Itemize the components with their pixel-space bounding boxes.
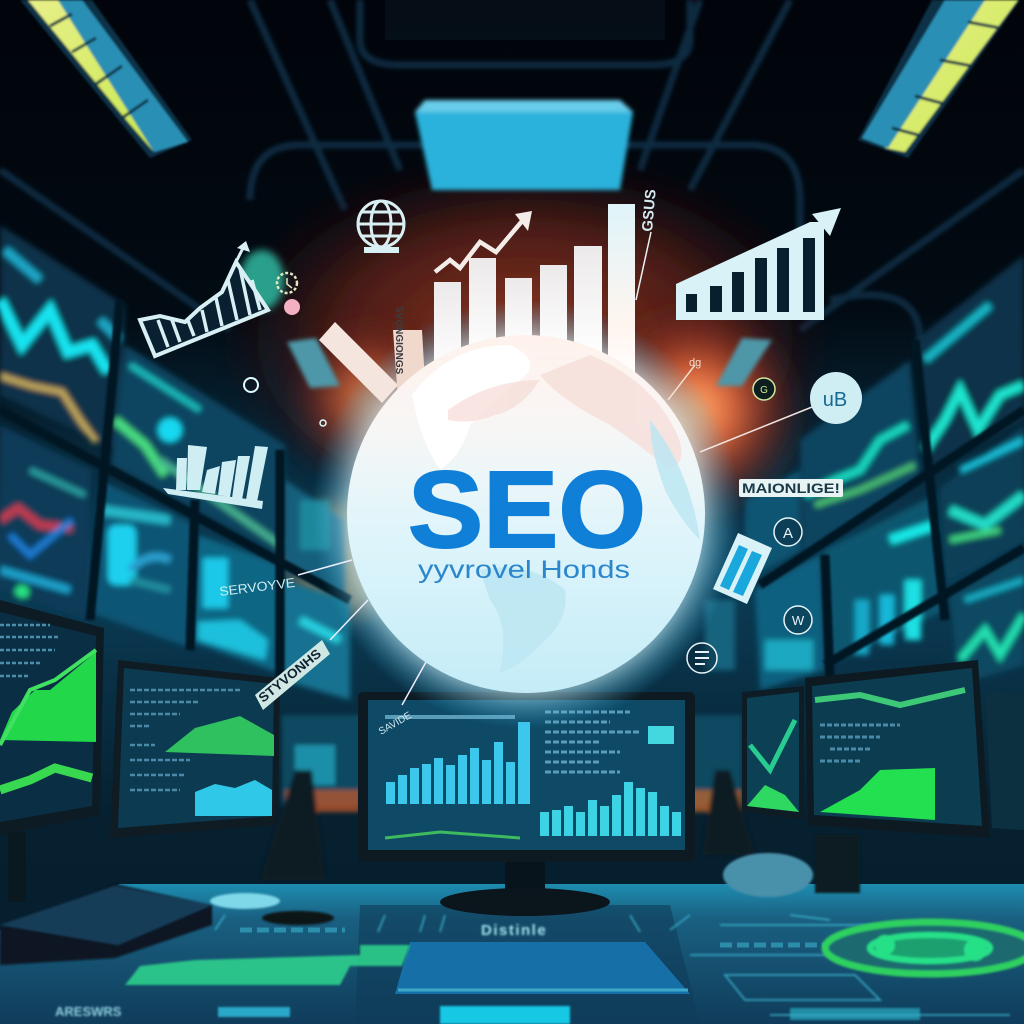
label: servoyve: SERVOYVE	[219, 575, 296, 599]
small dot	[320, 420, 326, 426]
icon: globe small	[358, 201, 404, 250]
icon: list circle	[687, 643, 717, 673]
icon: small ring	[244, 378, 258, 392]
left wall monitors	[0, 225, 350, 700]
globe continents	[412, 345, 530, 470]
label: top right vertical	[636, 189, 660, 300]
bar chart icon: small left	[163, 445, 268, 509]
desk label: Distinle	[481, 922, 547, 939]
icon: link circle: W	[792, 613, 805, 628]
desk props	[210, 835, 860, 925]
label: savide	[377, 662, 426, 738]
label: marketing tag: MAIONLIGE!	[742, 480, 840, 496]
label: rising tag	[668, 357, 701, 400]
label: top right vertical: GSUS	[639, 189, 660, 232]
icon: blue card	[713, 533, 772, 604]
background monitors: center-right	[690, 715, 755, 855]
ceiling light: left	[20, 0, 192, 158]
desktop monitor: right	[805, 660, 990, 838]
keyboard	[0, 884, 212, 965]
heading: SEO: SEO	[408, 449, 646, 571]
right wall monitors	[705, 255, 1024, 690]
red glow behind charts	[215, 150, 835, 615]
label: styvonhs tag: STYVONHS	[255, 646, 324, 705]
icon: small A circle	[774, 518, 802, 546]
icon: small green badge: G	[760, 385, 768, 396]
icon: line chart left	[140, 241, 284, 356]
desktop monitor: left	[110, 660, 280, 838]
icon: small A circle: A	[783, 525, 793, 542]
icon: gear	[277, 273, 297, 293]
desk surface	[0, 884, 1024, 1024]
small skylights	[287, 338, 772, 388]
subheading: yyvrovel Honds	[418, 556, 630, 584]
bar label: SVONGIONGS	[393, 306, 404, 375]
bar chart icon: right with arrow	[676, 208, 841, 320]
label: savide: SAVIDE	[377, 710, 414, 738]
callout: round badge	[700, 372, 862, 452]
label: rising tag: dg	[689, 357, 701, 369]
globe	[347, 335, 705, 693]
globe halo	[311, 299, 741, 729]
icon: link circle	[784, 606, 812, 634]
desktop monitor: center	[358, 692, 695, 916]
ceiling light: center panel	[415, 100, 633, 190]
desktop monitor: right small	[742, 686, 804, 820]
icon: small green badge	[753, 378, 775, 400]
desktop monitor: far left	[0, 600, 104, 902]
callout: round badge: uB	[823, 389, 847, 411]
label: servoyve	[219, 560, 352, 599]
icon: pink dot	[284, 299, 300, 315]
bar chart: rising bars behind globe	[319, 204, 635, 403]
background monitors: center-left	[260, 715, 362, 880]
label: styvonhs tag	[255, 600, 368, 710]
ceiling light: right	[858, 0, 1020, 158]
desktop monitor: far right	[985, 690, 1024, 830]
desk footer label: ARESWRS	[55, 1004, 122, 1019]
